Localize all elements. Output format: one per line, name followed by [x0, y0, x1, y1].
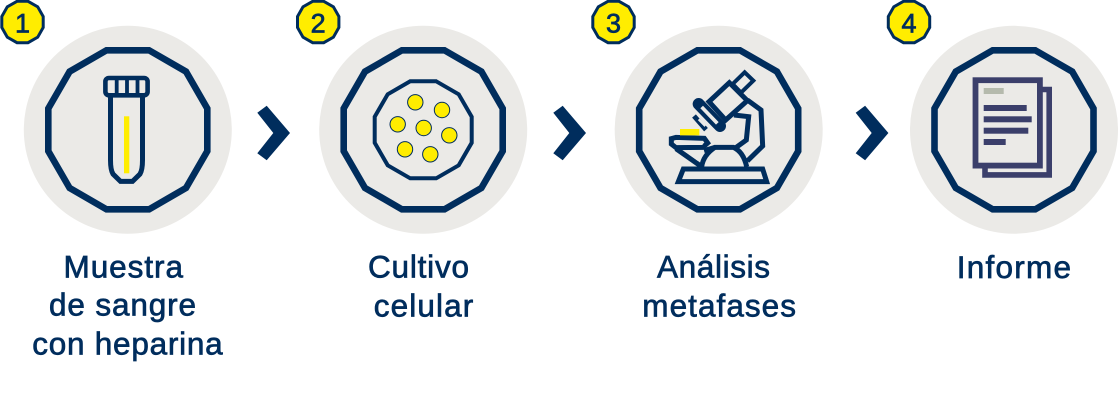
dodecagon frame 2 — [344, 50, 503, 209]
badge 3: 3 — [606, 9, 621, 39]
background circle 3 — [615, 26, 823, 234]
badge 4 — [888, 1, 930, 43]
dodecagon frame 3 — [639, 50, 798, 209]
background circle 1 — [24, 26, 232, 234]
icon: test tube — [105, 78, 148, 181]
badge 2 — [298, 1, 339, 43]
background circle 2 — [319, 26, 527, 234]
badge 1: 1 — [15, 9, 30, 39]
label 3 — [642, 249, 796, 324]
label 1: con heparina — [32, 325, 223, 361]
label 1 — [32, 248, 223, 361]
badge 3 — [593, 1, 634, 43]
arrow 3 — [856, 106, 888, 160]
step 4: report — [888, 1, 1118, 285]
icon: microscope — [671, 72, 767, 182]
step 2: cell culture — [298, 1, 527, 324]
badge 2: 2 — [311, 9, 326, 39]
label 2: celular — [374, 288, 473, 324]
label 1: Muestra — [64, 248, 183, 284]
label 3: metafases — [642, 288, 796, 324]
icon: culture dish — [375, 81, 472, 178]
arrow 1 — [257, 106, 290, 160]
badge 1 — [2, 1, 43, 43]
label 2: Cultivo — [368, 249, 469, 285]
background circle 4 — [910, 26, 1118, 234]
dodecagon frame 4 — [934, 50, 1094, 209]
arrow 2 — [553, 106, 586, 160]
step 3: metaphase analysis — [593, 1, 823, 324]
dodecagon frame 1 — [48, 50, 207, 209]
label 1: de sangre — [49, 286, 196, 322]
label 4: Informe — [957, 249, 1071, 285]
label 3: Análisis — [657, 249, 770, 285]
icon: documents — [976, 80, 1049, 175]
badge 4: 4 — [901, 9, 917, 39]
label 2 — [368, 249, 473, 324]
step 1: blood sample — [2, 1, 232, 361]
